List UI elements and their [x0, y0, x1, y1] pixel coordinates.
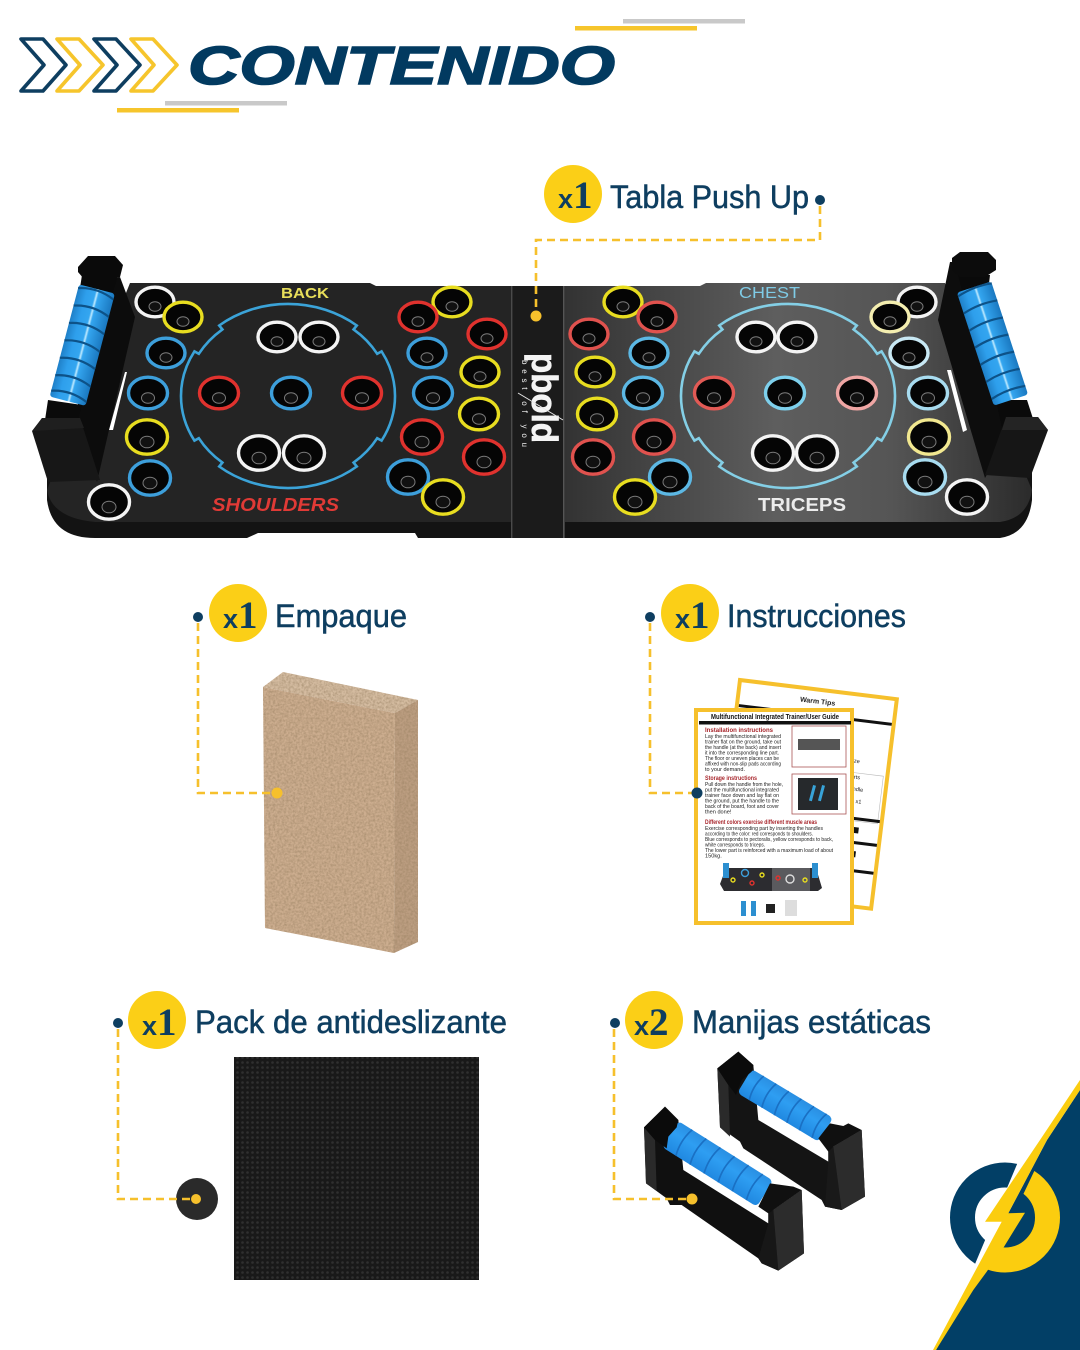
front handle	[644, 1107, 804, 1271]
right target ring	[681, 304, 895, 488]
callout label: Manijas estaticas: x2	[634, 1001, 669, 1044]
front sheet: user guide: trainer flat on the ground, take out	[705, 740, 781, 746]
front sheet: user guide	[696, 710, 852, 923]
box: side face	[394, 700, 418, 953]
left panel holes	[88, 287, 506, 519]
front sheet: user guide: Blue corresponds to pectoralis, yellow corresponds to back,	[705, 837, 833, 843]
callout label: Manijas estaticas	[610, 991, 931, 1049]
callout label: Manijas estaticas: Manijas estáticas	[692, 1004, 931, 1040]
front sheet: user guide: Pull down the handle from the hole,	[705, 782, 783, 788]
logo: pbold: pbold	[524, 353, 565, 443]
title: CONTENIDO	[188, 36, 615, 96]
callout label: Tabla Push Up: x1	[558, 174, 593, 217]
zone label: SHOULDERS: SHOULDERS	[212, 495, 339, 515]
front sheet: user guide: Different colors exercise different muscle areas	[705, 820, 818, 826]
callout label: Instrucciones: Instrucciones	[727, 598, 906, 634]
static handles	[644, 1052, 865, 1271]
callout label: Empaque: x1	[223, 594, 258, 637]
callout label: Instrucciones: x1	[675, 594, 710, 637]
front sheet: user guide: back of the board, foot and cover	[705, 804, 779, 810]
front sheet: user guide: Installation instructions	[705, 728, 774, 734]
callout label: Instrucciones	[645, 584, 906, 642]
board: centre hinge	[511, 286, 565, 538]
dashed connector: board	[530, 206, 820, 322]
callout label: Empaque	[193, 584, 407, 642]
corner brand logo	[933, 1080, 1080, 1350]
back sheet: warm tips: Size	[849, 758, 860, 765]
board: left panel	[47, 283, 512, 522]
ring icon: navy half	[962, 1175, 1048, 1260]
callout label: Empaque: Empaque	[275, 598, 407, 634]
callout label: Pack de antideslizante	[113, 991, 507, 1049]
front sheet: user guide: it into the corresponding line part.	[705, 750, 779, 756]
front sheet: user guide: the handle (at the back) and insert	[705, 745, 781, 751]
callout label: Tabla Push Up	[544, 165, 825, 223]
front sheet: user guide: The lower part is reinforced with a maximum load of about	[705, 848, 833, 854]
left handle	[32, 256, 135, 482]
back handle	[717, 1052, 865, 1210]
dashed connector: box	[198, 623, 282, 798]
front sheet: user guide: the ground, put the handle to the	[705, 798, 779, 804]
front sheet: user guide: according to the color: red corresponds to shoulders.	[705, 832, 813, 838]
zone label: TRICEPS: TRICEPS	[758, 495, 846, 515]
left target ring	[181, 304, 395, 488]
push up board	[32, 252, 1048, 538]
anti-slip mat	[234, 1057, 479, 1280]
navy corner triangle	[936, 1090, 1080, 1350]
front sheet: user guide: affixed with non-slip pads according	[705, 762, 781, 768]
header accent lines top	[575, 19, 745, 30]
instruction sheets	[696, 680, 897, 923]
front sheet: user guide: Multifunctional Integrated Trainer/User Guide	[711, 714, 839, 721]
right panel holes	[570, 287, 988, 514]
zone label: CHEST: CHEST	[739, 285, 801, 302]
zone label: BACK: BACK	[281, 285, 329, 302]
dashed connector: pad	[118, 1029, 201, 1204]
back sheet: warm tips: Parts	[847, 774, 861, 781]
back sheet: warm tips: Handle	[845, 786, 864, 794]
logo: pbold: best of you	[520, 360, 529, 447]
header: chevrons icon	[21, 39, 177, 91]
right handle	[938, 252, 1048, 478]
front sheet: user guide: Exercise corresponding part by inserting the handles	[705, 826, 823, 832]
front sheet: user guide: then done!	[705, 810, 732, 816]
dashed connector: handles	[614, 1029, 698, 1204]
box: top face	[263, 672, 418, 713]
front sheet: user guide: Lay the multifunctional integrated	[705, 734, 781, 740]
cardboard box image	[263, 672, 418, 953]
board: right panel	[565, 283, 1032, 522]
front sheet: user guide: 150kg.	[705, 854, 722, 860]
front sheet: user guide: to your demand.	[705, 767, 745, 773]
back sheet: warm tips	[714, 680, 897, 909]
board: front lip	[47, 470, 1032, 538]
callout label: Tabla Push Up: Tabla Push Up	[610, 179, 809, 215]
header accent lines bottom	[117, 101, 287, 112]
lightning bolt and diagonal stripe	[933, 1080, 1080, 1350]
back sheet: warm tips: Pad x1	[844, 798, 862, 806]
box: front face	[263, 687, 395, 953]
back sheet: warm tips: Warm Tips	[800, 696, 836, 708]
front sheet: user guide: Storage instructions	[705, 776, 758, 782]
dashed connector: sheets	[650, 623, 702, 798]
front sheet: user guide: white corresponds to triceps.	[704, 842, 765, 848]
ring icon: yellow half	[962, 1175, 1048, 1260]
front sheet: user guide: trainer face down and lay flat on	[705, 793, 779, 799]
front sheet: user guide: put the multifunctional integrated	[705, 788, 779, 794]
callout label: Pack de antideslizante: Pack de antideslizante	[195, 1004, 507, 1040]
small anti-slip pad	[176, 1178, 218, 1220]
front sheet: user guide: The floor or uneven places can be	[705, 756, 779, 762]
callout label: Pack de antideslizante: x1	[142, 1001, 177, 1044]
